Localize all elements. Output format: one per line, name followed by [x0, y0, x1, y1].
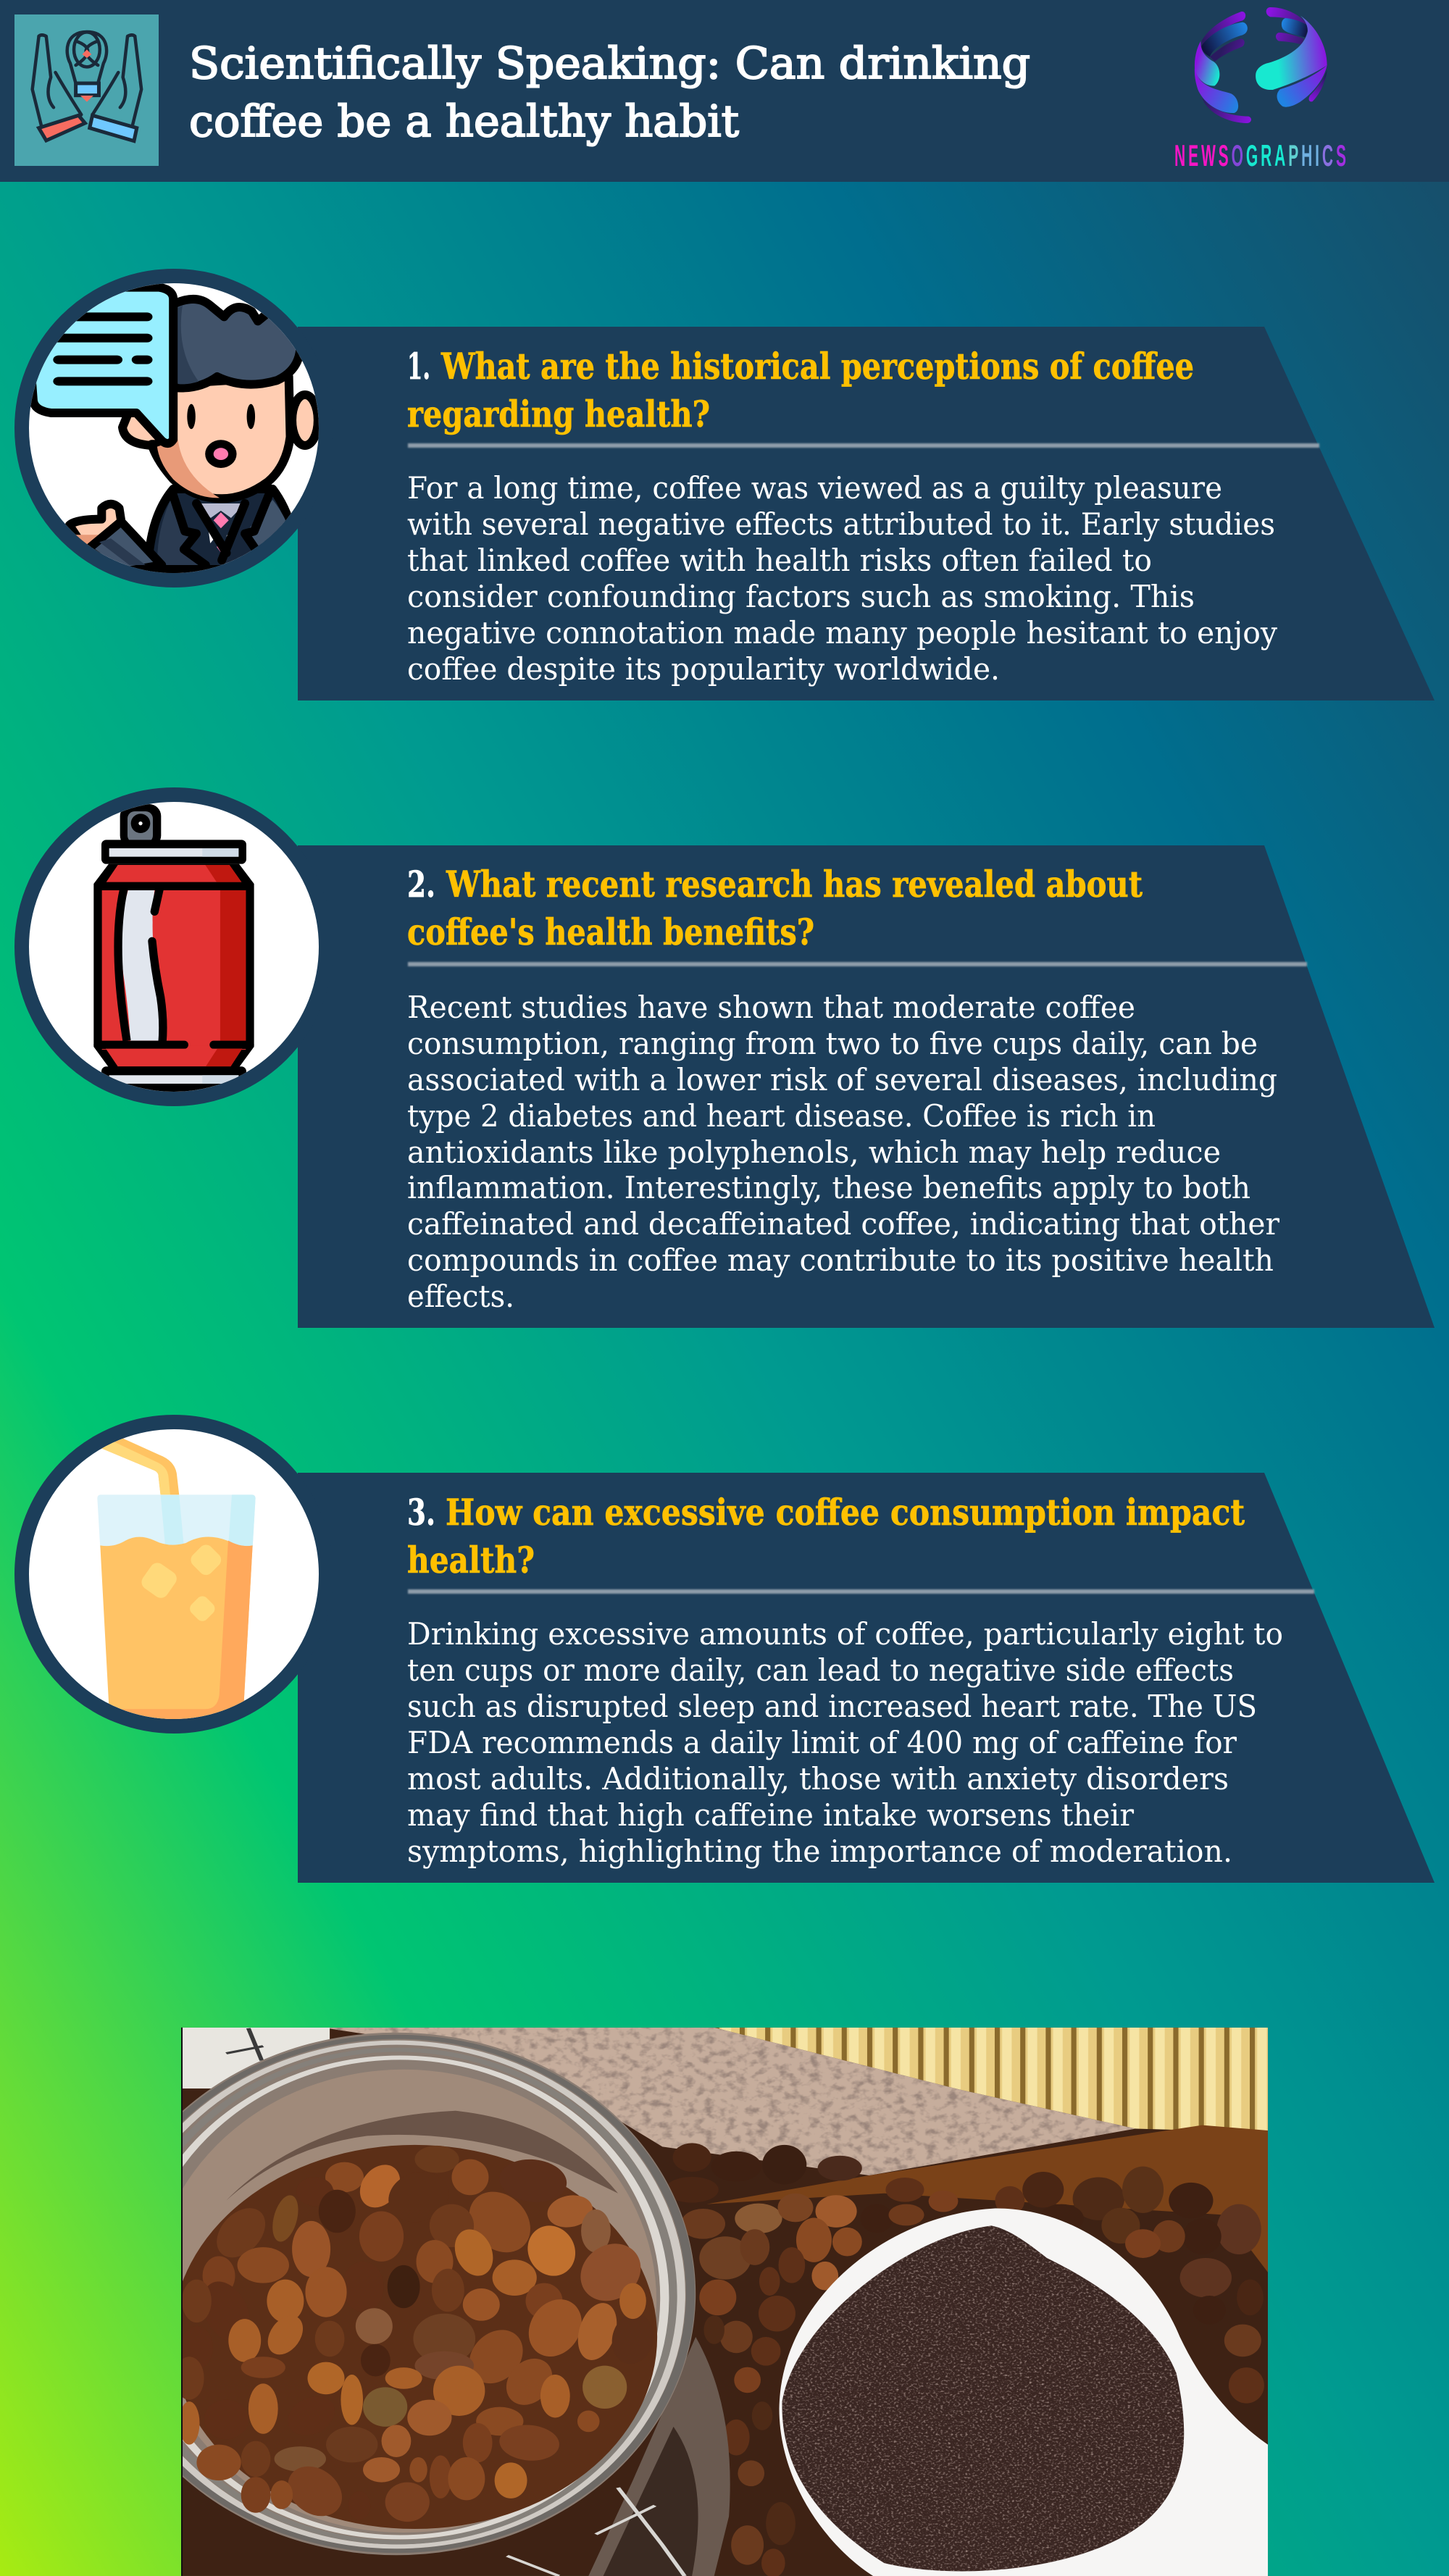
heading 1: regarding health? [407, 393, 710, 435]
body text 3: FDA recommends a daily limit of 400 mg of caffeine for [407, 1725, 1237, 1760]
body text 2: compounds in coffee may contribute to its positive health [407, 1242, 1274, 1278]
photo: coffee beans in a jar and ground coffee in a spoon [97, 2028, 1268, 2576]
body text 3: symptoms, highlighting the importance of moderation. [407, 1833, 1232, 1869]
heading 3: health? [407, 1539, 535, 1581]
header icon: hands holding a light bulb [14, 14, 159, 166]
heading 2: What recent research has revealed about [446, 863, 1143, 906]
Newsographics logo: NEWSOGRAPHICS [1174, 139, 1346, 173]
body text 3: ten cups or more daily, can lead to negative side effects [407, 1652, 1234, 1688]
header title [189, 38, 1030, 147]
jar [182, 2027, 730, 2576]
header bar [0, 0, 1449, 182]
body text 1: that linked coffee with health risks often failed to [407, 543, 1152, 578]
body text 1: coffee despite its popularity worldwide. [407, 651, 1000, 687]
heading 1: 1. [407, 345, 430, 388]
body text 2: antioxidants like polyphenols, which may help reduce [407, 1134, 1221, 1170]
body text 3: most adults. Additionally, those with anxiety disorders [407, 1761, 1229, 1797]
panel 2: recent research [298, 845, 1435, 1328]
body text 2: effects. [407, 1279, 514, 1314]
body text 2: type 2 diabetes and heart disease. Coffee is rich in [407, 1098, 1156, 1134]
heading 2: 2. [407, 863, 435, 906]
body text 3: may find that high caffeine intake worsens their [407, 1797, 1135, 1833]
body text 3: Drinking excessive amounts of coffee, particularly eight to [407, 1616, 1283, 1652]
header title: Scientifically Speaking: Can drinking [189, 38, 1030, 89]
heading 1: What are the historical perceptions of coffee [440, 345, 1194, 388]
body text 1: consider confounding factors such as smoking. This [407, 579, 1195, 614]
Newsographics logo [1174, 7, 1346, 173]
tray beans [665, 2143, 1264, 2576]
heading 2 [407, 863, 1143, 953]
body text 1: negative connotation made many people hesitant to enjoy [407, 615, 1277, 651]
beans inside the jar [175, 2146, 656, 2522]
body text 3 [407, 1616, 1283, 1869]
body text 2: Recent studies have shown that moderate coffee [407, 990, 1135, 1025]
body text 2: associated with a lower risk of several diseases, including [407, 1062, 1277, 1097]
heading 2: coffee's health benefits? [407, 911, 814, 953]
body text 1 [407, 470, 1277, 687]
jar clasp wires [507, 2488, 685, 2576]
icon circle 2: crushed soda can [22, 795, 326, 1099]
body text 2 [407, 990, 1280, 1314]
heading 3: How can excessive coffee consumption impact [446, 1491, 1245, 1534]
body text 3: such as disrupted sleep and increased heart rate. The US [407, 1689, 1257, 1724]
body text 2: caffeinated and decaffeinated coffee, indicating that other [407, 1206, 1280, 1242]
panel 3: excessive consumption [298, 1473, 1435, 1883]
body text 2: consumption, ranging from two to five cups daily, can be [407, 1026, 1258, 1061]
spoon with ground coffee [780, 2209, 1268, 2576]
header title: coffee be a healthy habit [189, 96, 739, 147]
heading 3 [407, 1491, 1245, 1581]
heading 1 [407, 345, 1194, 435]
panel 1: historical perceptions [298, 327, 1435, 701]
icon circle 3: iced drink [22, 1422, 326, 1726]
icon circle 1: businessman speaking [22, 276, 326, 580]
heading 3: 3. [407, 1491, 435, 1534]
body text 1: For a long time, coffee was viewed as a guilty pleasure [407, 470, 1222, 506]
body text 1: with several negative effects attributed to it. Early studies [407, 506, 1275, 542]
body text 2: inflammation. Interestingly, these benefits apply to both [407, 1170, 1250, 1205]
